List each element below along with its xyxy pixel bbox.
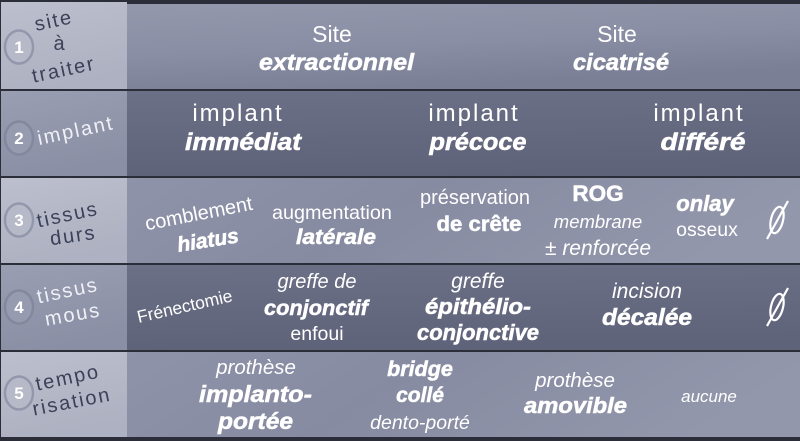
implant immédiat: implant: [192, 100, 284, 127]
prothèse amovible: prothèse: [534, 369, 615, 392]
incision décalée: décalée: [602, 304, 692, 330]
greffe épithélio-conjonctive: épithélio-: [425, 294, 531, 319]
préservation de crête: de crête: [436, 213, 522, 236]
implant immédiat: [185, 100, 302, 156]
onlay osseux: osseux: [676, 219, 738, 241]
row 2 content cell: [127, 91, 800, 176]
row 3 label: tissus: [35, 198, 101, 232]
row 1: site à traiter: [1, 2, 800, 89]
site cicatrisé: cicatrisé: [573, 49, 669, 75]
row 3 content cell: [127, 178, 800, 263]
prothèse implanto-portée: [199, 356, 312, 434]
row 2 label: implant: [35, 112, 116, 150]
ROG membrane ± renforcée: membrane: [554, 211, 642, 232]
row 5 number badge: [5, 376, 33, 410]
row 2 label cell: [1, 91, 127, 176]
bridge collé dento-porté: bridge: [387, 357, 453, 381]
site extractionnel: [259, 21, 415, 75]
greffe épithélio-conjonctive: conjonctive: [417, 320, 539, 345]
row 2 number badge: [5, 122, 33, 154]
implant précoce: [428, 100, 526, 156]
row 1 number badge: [5, 30, 33, 64]
ROG membrane ± renforcée: ± renforcée: [545, 237, 651, 260]
ROG membrane ± renforcée: ROG: [572, 181, 624, 206]
row 4 number badge: [5, 290, 33, 324]
incision décalée: incision: [612, 280, 682, 303]
implant précoce: implant: [428, 100, 520, 127]
implant différé: [653, 100, 746, 156]
ROG membrane ± renforcée: [545, 181, 651, 260]
empty set symbol: [767, 201, 788, 239]
row 4 content cell: [127, 265, 800, 350]
prothèse implanto-portée: prothèse: [215, 356, 296, 379]
row 4 label cell: [1, 265, 127, 350]
row 1 number badge: 1: [14, 38, 24, 57]
bridge collé dento-porté: dento-porté: [370, 412, 470, 434]
prothèse implanto-portée: portée: [217, 408, 293, 434]
row 1 label cell: [1, 2, 127, 89]
aucune: aucune: [681, 387, 737, 406]
empty set symbol: [767, 288, 788, 326]
site cicatrisé: [573, 21, 669, 75]
row 3 label: durs: [49, 222, 98, 250]
onlay osseux: [676, 191, 738, 241]
greffe de conjonctif enfoui: greffe de: [278, 271, 356, 293]
greffe épithélio-conjonctive: greffe: [451, 270, 505, 293]
site extractionnel: Site: [312, 21, 352, 47]
row 2 number badge: 2: [14, 129, 24, 148]
greffe de conjonctif enfoui: [264, 271, 370, 345]
greffe de conjonctif enfoui: conjonctif: [264, 296, 370, 320]
augmentation latérale: latérale: [296, 226, 376, 249]
row 1 label: site: [33, 6, 75, 36]
row 3 label: [35, 198, 101, 250]
row 5 content cell: [127, 352, 800, 437]
préservation de crête: préservation: [420, 187, 530, 209]
row 4 label: tissus: [35, 274, 101, 308]
incision décalée: [602, 280, 692, 330]
implant différé: implant: [653, 100, 745, 127]
comblement hiatus: [143, 193, 255, 257]
row 3 number badge: 3: [14, 211, 24, 230]
row 1 content cell: [127, 4, 800, 89]
row 5 label cell: [1, 352, 127, 437]
row 3 number badge: [5, 204, 33, 236]
row 4 number badge: 4: [14, 298, 24, 317]
prothèse amovible: [524, 369, 627, 418]
implant précoce: précoce: [428, 129, 526, 156]
onlay osseux: onlay: [676, 191, 735, 216]
implant différé: différé: [660, 129, 746, 156]
comblement hiatus: hiatus: [176, 224, 240, 257]
row 5: temporisation: [1, 352, 800, 437]
site extractionnel: extractionnel: [259, 49, 415, 75]
implant immédiat: immédiat: [185, 129, 302, 156]
row 5 number badge: 5: [14, 384, 24, 403]
bridge collé dento-porté: collé: [396, 384, 444, 407]
bridge collé dento-porté: [370, 357, 470, 434]
row 1 label: traiter: [30, 53, 98, 88]
row 4 label: [35, 274, 103, 331]
row 5 label: [31, 361, 113, 421]
row 3: tissus durs: [1, 178, 800, 263]
row 5 label: risation: [31, 384, 113, 421]
prothèse amovible: amovible: [524, 393, 627, 418]
row 5 label: tempo: [34, 361, 102, 396]
préservation de crête: [420, 187, 530, 236]
row 4 label: mous: [43, 299, 103, 331]
augmentation latérale: augmentation: [272, 202, 392, 224]
row 1 label: à: [53, 33, 67, 55]
comblement hiatus: comblement: [143, 193, 255, 235]
augmentation latérale: [272, 202, 392, 249]
row 2: implant: [1, 91, 800, 176]
row 3 label cell: [1, 178, 127, 263]
prothèse implanto-portée: implanto-: [199, 381, 312, 407]
row 4: tissus mous: [1, 265, 800, 350]
greffe épithélio-conjonctive: [417, 270, 539, 345]
frénectomie: Frénectomie: [135, 285, 234, 327]
greffe de conjonctif enfoui: enfoui: [290, 323, 344, 345]
site cicatrisé: Site: [597, 21, 637, 47]
row 1 label: [30, 6, 98, 88]
